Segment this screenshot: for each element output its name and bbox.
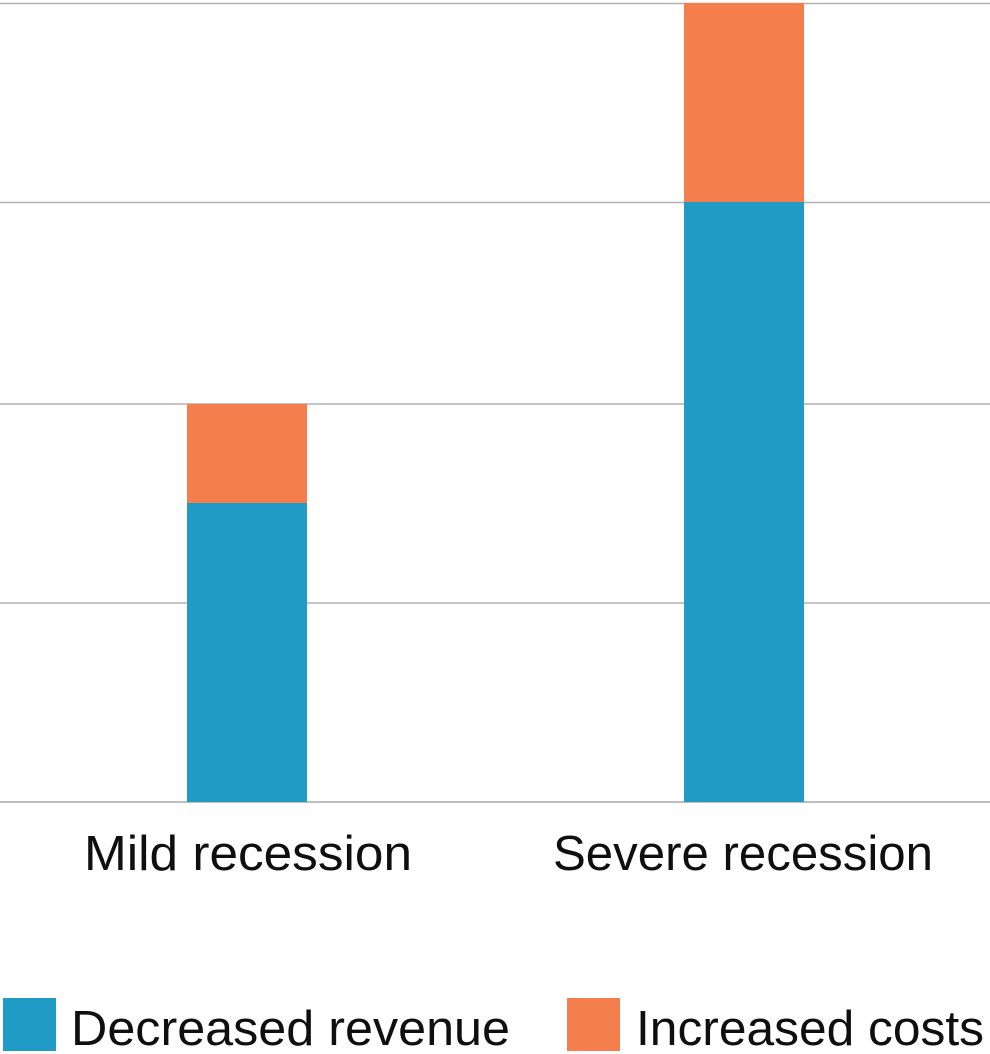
axis label: severe recession: Severe recession xyxy=(553,827,933,881)
axis label: mild recession: Mild recession xyxy=(84,827,412,881)
bar: mild recession xyxy=(187,404,307,802)
bar: severe recession xyxy=(684,3,804,802)
